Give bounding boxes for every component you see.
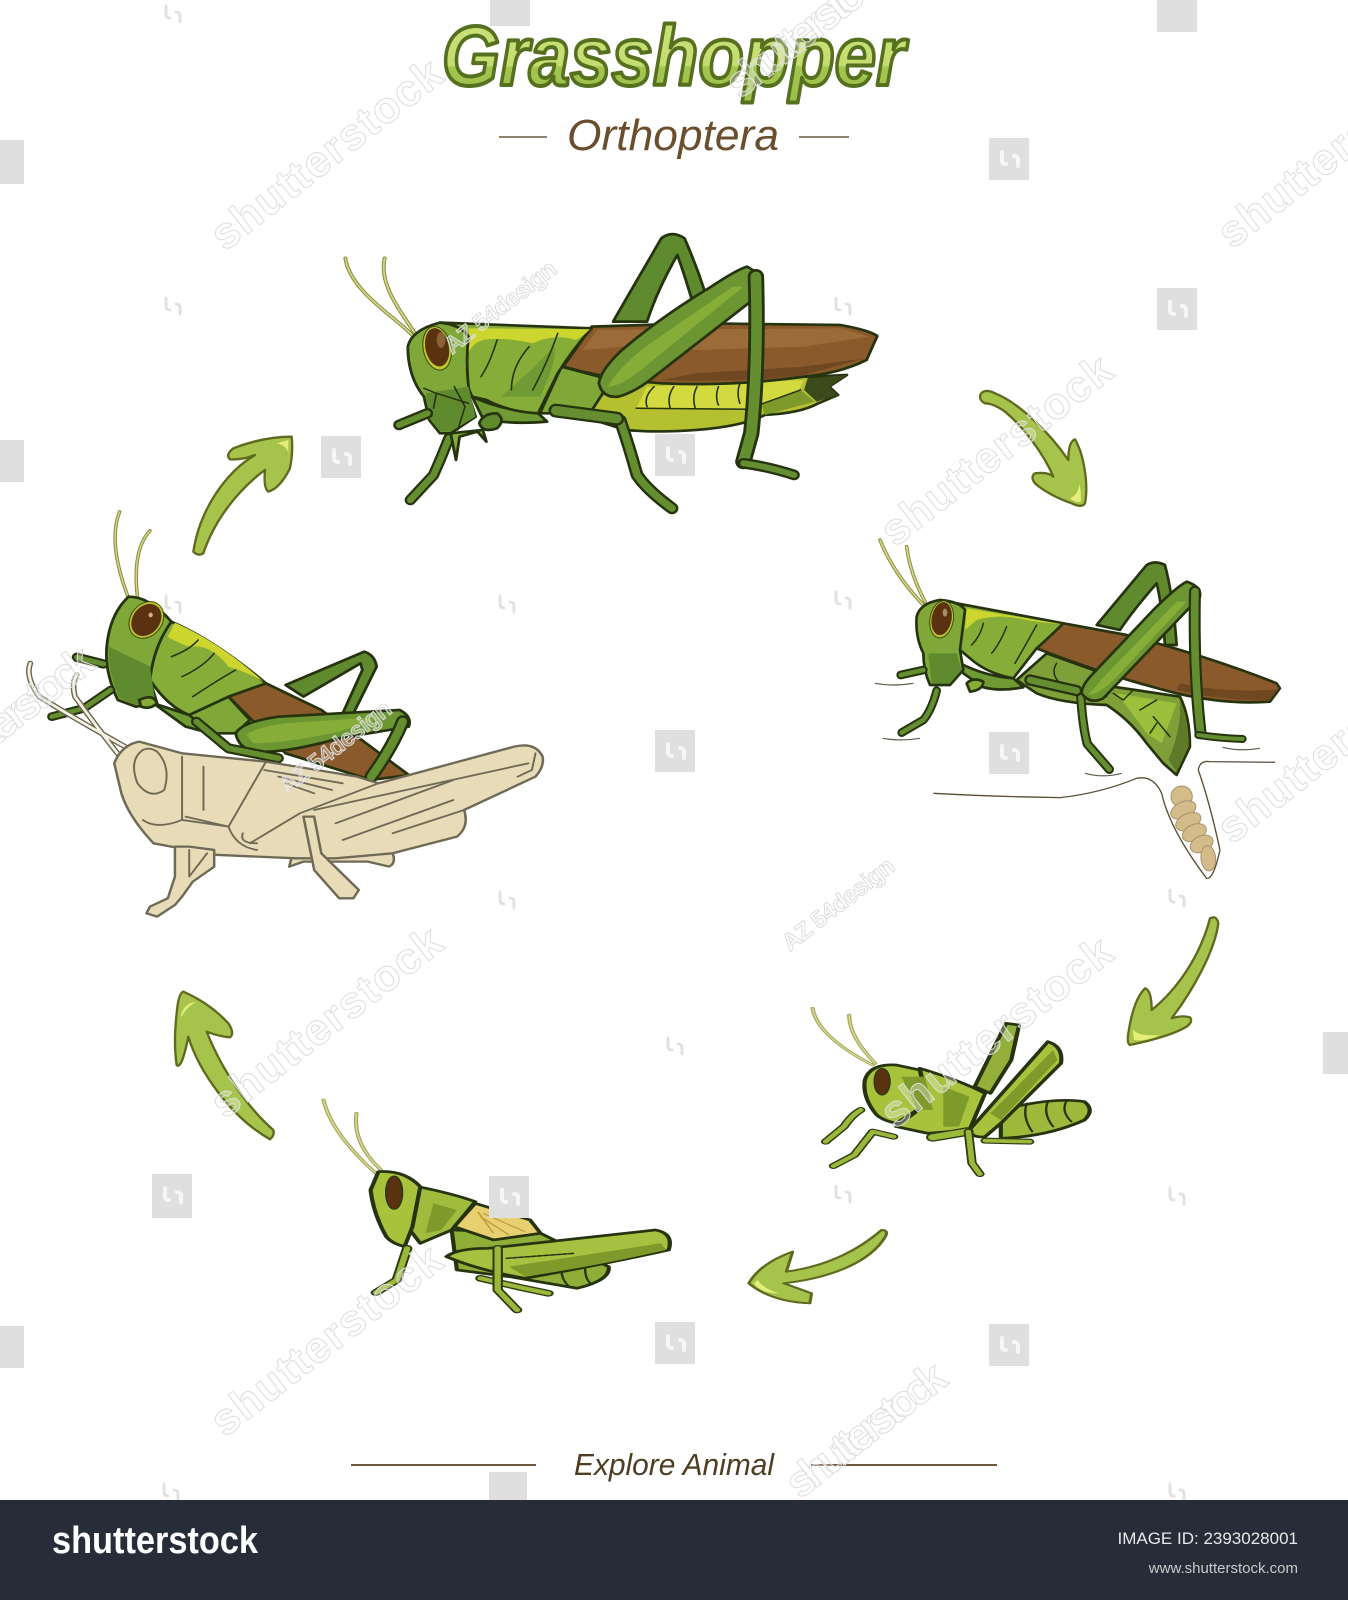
bottom bar — [0, 1500, 1348, 1600]
head and thorax — [864, 1065, 985, 1133]
far hind leg — [613, 234, 706, 322]
site url: www.shutterstock.com — [1148, 1560, 1298, 1577]
hind femur — [1082, 582, 1200, 701]
subtitle: Orthoptera — [567, 111, 779, 160]
grasshopper: moulting adult — [29, 512, 543, 917]
arrow: eggs to nymph — [1128, 917, 1218, 1045]
footer caption: Explore Animal — [574, 1447, 775, 1482]
thorax — [189, 697, 250, 733]
antennae — [880, 540, 925, 605]
far hind leg — [286, 652, 377, 713]
far hind leg — [975, 1023, 1019, 1093]
legs far — [985, 1132, 1030, 1151]
legs — [901, 670, 1109, 769]
shed body — [114, 742, 543, 858]
head — [106, 596, 171, 707]
arrow: late nymph to moulting — [175, 992, 274, 1139]
grasshopper: early nymph — [813, 1008, 1090, 1174]
hind tibia — [371, 722, 403, 777]
pronotum — [150, 622, 266, 715]
abdomen — [452, 1230, 609, 1288]
watermark text: shutterstock — [201, 1235, 452, 1446]
far hind leg — [1097, 562, 1177, 645]
watermark text: AZ 54design — [777, 852, 900, 957]
abdomen — [1001, 1100, 1090, 1138]
hind femur — [969, 1042, 1061, 1137]
shed front leg — [146, 847, 214, 917]
watermark text: AZ 54design — [274, 695, 397, 800]
grasshopper: female laying eggs — [875, 540, 1280, 878]
head — [408, 323, 476, 433]
arrow: moulting to adult — [193, 437, 292, 555]
abdomen — [572, 375, 847, 431]
wing — [563, 323, 877, 384]
middle leg — [556, 411, 672, 508]
shed antennae — [29, 663, 125, 758]
watermark outline icons — [164, 6, 1184, 1500]
pronotum — [440, 323, 592, 413]
middle leg — [196, 722, 278, 758]
watermark text: shutterstock — [871, 927, 1122, 1138]
front legs — [399, 413, 502, 500]
chest — [154, 703, 211, 733]
watermark text: shutterstock — [871, 345, 1122, 556]
arrow: adult to egg laying — [980, 391, 1086, 506]
watermark text: shutterstock — [201, 49, 452, 260]
hind femur — [446, 1230, 670, 1278]
watermark text: shutterstock — [201, 917, 452, 1128]
wing — [228, 683, 409, 780]
grasshopper: adult — [345, 234, 877, 508]
hind tibia and foot — [1195, 592, 1243, 739]
shed body details — [134, 749, 536, 850]
antennae — [345, 258, 415, 338]
shed legs far — [289, 853, 394, 867]
grasshopper: late nymph — [324, 1100, 670, 1310]
legs near — [826, 1110, 980, 1174]
hind femur — [599, 267, 762, 397]
wing — [1037, 623, 1280, 702]
antennae — [115, 512, 150, 600]
shed skin — [29, 663, 543, 917]
image id: IMAGE ID: 2393028001 — [1117, 1529, 1298, 1548]
title: Grasshopper — [442, 9, 909, 103]
watermark text: AZ 54design — [439, 255, 562, 360]
extended abdomen — [1017, 653, 1190, 775]
shed hind leg — [303, 817, 359, 898]
arrow: nymph to late nymph — [749, 1230, 886, 1303]
chest — [960, 663, 1023, 689]
ground line and egg chamber — [875, 683, 1275, 878]
antennae — [813, 1008, 875, 1065]
hind tibia and foot — [743, 277, 794, 475]
head — [371, 1171, 420, 1247]
head — [916, 599, 965, 685]
thorax — [540, 367, 611, 413]
pronotum — [957, 603, 1063, 678]
pronotum — [407, 1187, 475, 1243]
hind femur — [236, 710, 410, 752]
hind tibia — [498, 1248, 517, 1310]
logo: shutterstock — [52, 1520, 259, 1562]
wing bud — [454, 1203, 541, 1240]
front legs — [52, 657, 157, 717]
eggs — [1167, 782, 1217, 872]
chest — [472, 397, 547, 423]
antennae — [324, 1100, 381, 1173]
far legs — [376, 1248, 548, 1293]
watermark text: shutterstock — [776, 1352, 956, 1508]
